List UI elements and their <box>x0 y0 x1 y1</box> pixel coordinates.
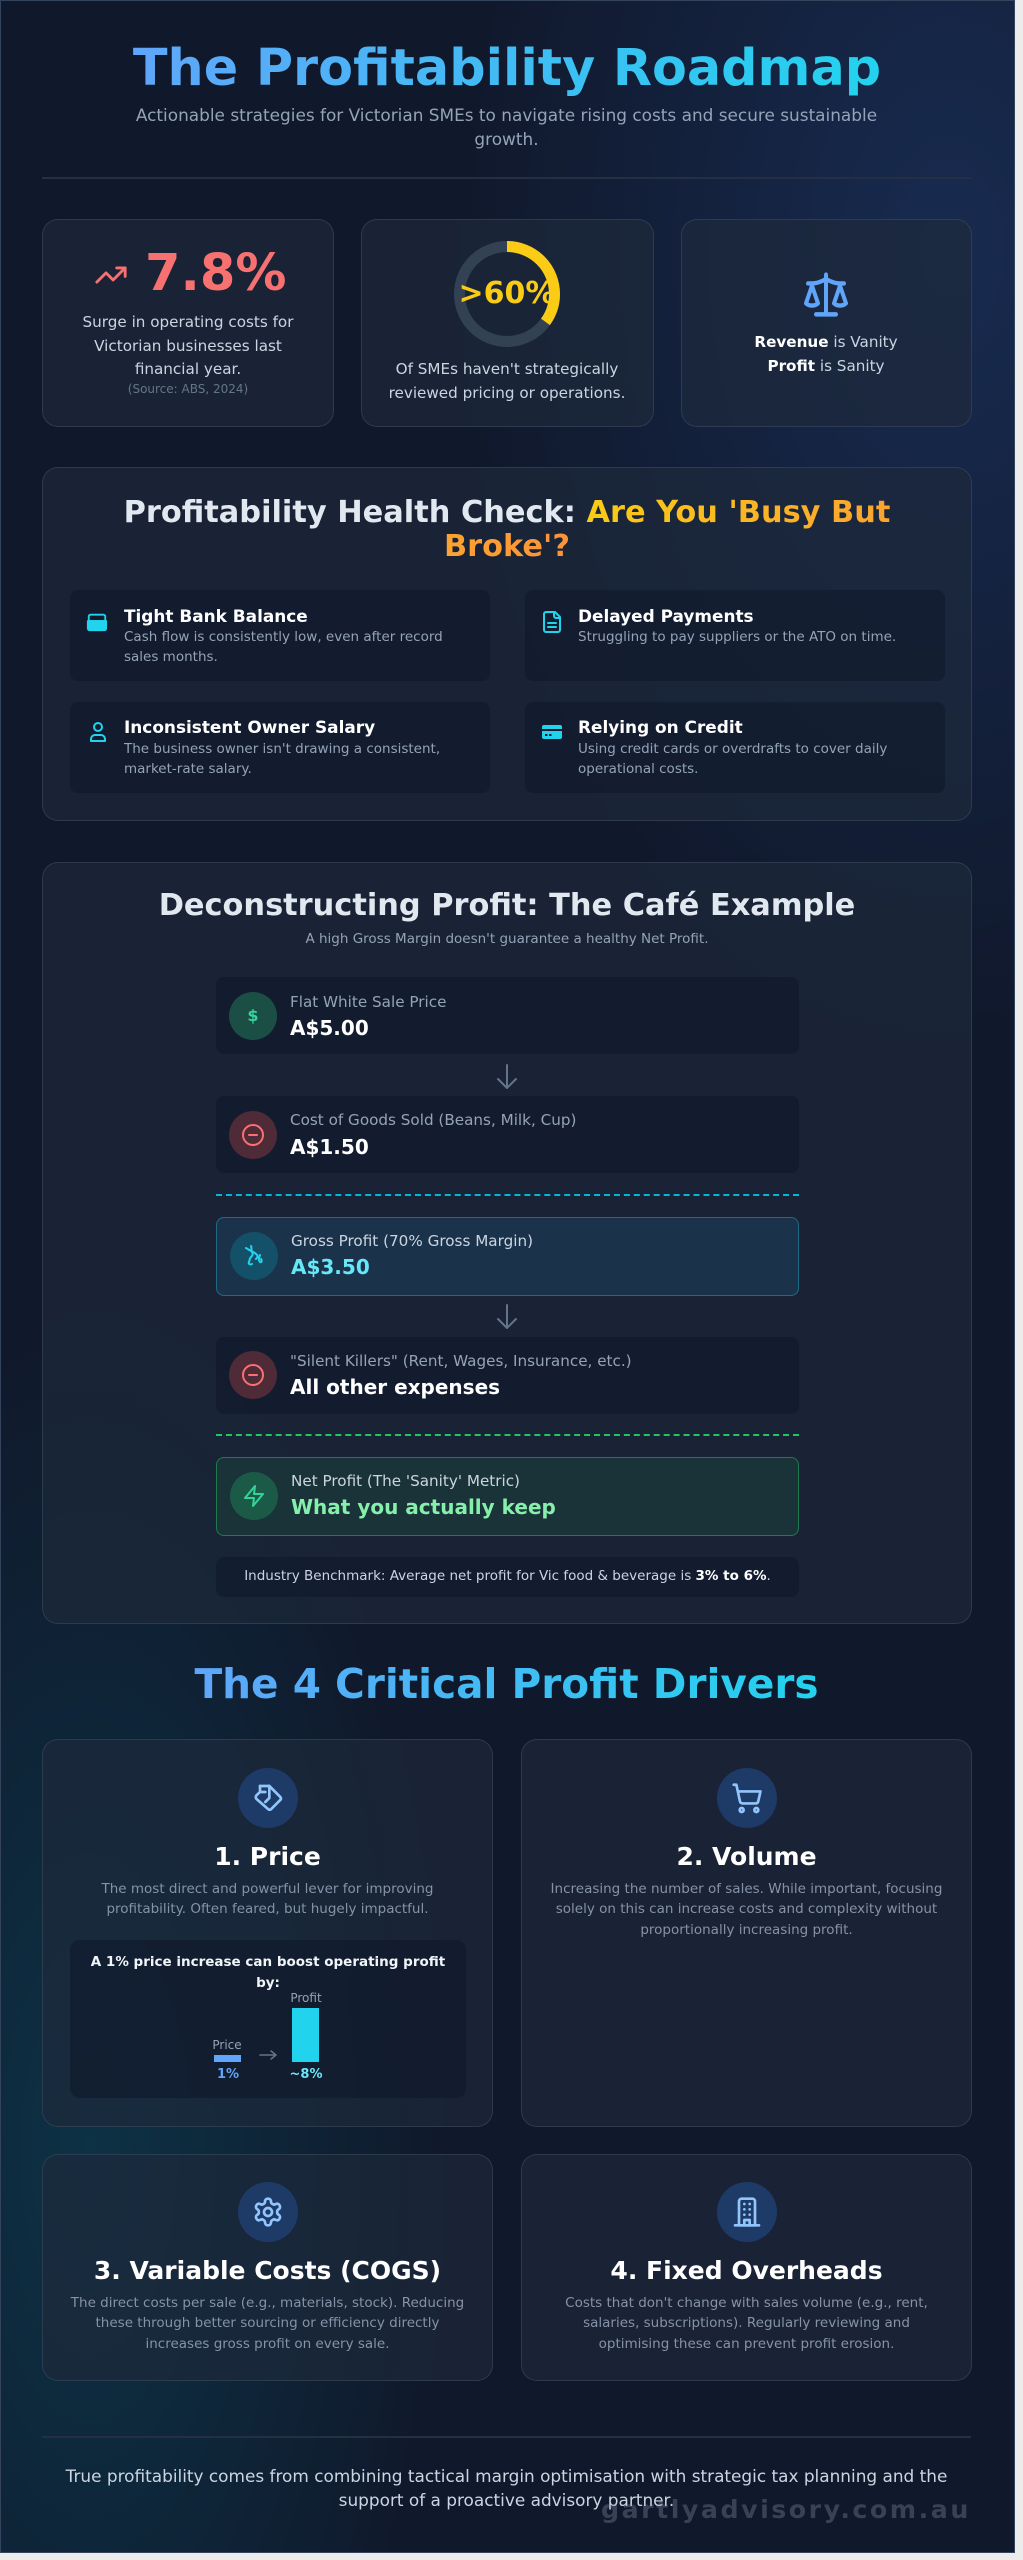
panel: stat 7.8% <box>42 219 334 427</box>
item text: Using credit cards or overdrafts to cover daily <box>578 741 887 757</box>
card text <box>551 1881 942 1938</box>
profit label: Profit <box>290 1991 322 2005</box>
item title: Relying on Credit <box>578 717 743 737</box>
icon: trending up <box>95 266 127 284</box>
item: relying on credit <box>525 702 945 793</box>
panel: fixed overheads <box>521 2154 972 2381</box>
card text: increases gross profit on every sale. <box>145 2336 390 2352</box>
card text <box>101 1881 433 1917</box>
icon: credit card <box>542 725 562 739</box>
row: gross profit <box>216 1217 799 1296</box>
stat description <box>389 360 625 402</box>
card text: The direct costs per sale (e.g., materials, stock). Reducing <box>71 2295 464 2311</box>
item text: market-rate salary. <box>124 761 252 777</box>
icon: gross profit <box>230 1232 278 1280</box>
card text <box>565 2295 928 2352</box>
icon: document <box>543 611 561 633</box>
card text: Increasing the number of sales. While important, focusing <box>551 1881 942 1897</box>
stat description <box>83 313 294 378</box>
card text: The most direct and powerful lever for improving <box>102 1881 433 1897</box>
net divider <box>216 1434 799 1436</box>
icon: gear <box>238 2182 298 2242</box>
item: delayed payments <box>525 590 945 681</box>
callout heading: A 1% price increase can boost operating profit <box>91 1954 445 1970</box>
footer message: True profitability comes from combining tactical margin optimisation with strategic tax planning and the <box>66 2466 947 2486</box>
row label: Gross Profit (70% Gross Margin) <box>291 1232 533 1250</box>
profit value: ~8% <box>290 2067 322 2082</box>
item: tight bank balance <box>70 590 490 681</box>
panel: revenue vs profit <box>681 219 972 427</box>
icon: scales <box>804 272 848 317</box>
donut chart <box>454 241 560 347</box>
heading <box>124 495 890 564</box>
arrow down <box>497 1304 517 1329</box>
panel: variable costs <box>42 2154 493 2381</box>
callout heading: by: <box>256 1975 280 1991</box>
stat description: Surge in operating costs for <box>83 313 293 331</box>
price bar <box>214 2055 241 2062</box>
subtitle <box>136 105 877 149</box>
row value: A$3.50 <box>291 1255 370 1279</box>
item text: The business owner isn't drawing a consistent, <box>124 741 440 757</box>
row: sale price <box>216 977 799 1054</box>
card title: 4. Fixed Overheads <box>610 2256 883 2285</box>
price value: 1% <box>217 2067 239 2082</box>
heading: profit drivers: The 4 Critical Profit Drivers <box>194 1660 819 1708</box>
card text <box>70 2295 464 2352</box>
row: other expenses <box>216 1337 799 1414</box>
icon: minus circle <box>229 1111 277 1159</box>
item text <box>124 629 443 665</box>
item text: sales months. <box>124 649 218 665</box>
watermark: gartlyadvisory.com.au <box>601 2495 971 2524</box>
panel: cafe example <box>42 862 972 1624</box>
item text: Cash flow is consistently low, even after record <box>124 629 443 645</box>
card text: solely on this can increase costs and complexity without <box>556 1901 937 1917</box>
panel: price <box>42 1739 493 2127</box>
stat description: reviewed pricing or operations. <box>389 384 625 402</box>
row value: A$1.50 <box>290 1135 369 1159</box>
card title: 2. Volume <box>676 1842 817 1871</box>
item text: Struggling to pay suppliers or the ATO on time. <box>578 629 896 645</box>
card text: optimising these can prevent profit erosion. <box>599 2336 894 2352</box>
card text: Costs that don't change with sales volume (e.g., rent, <box>565 2295 928 2311</box>
bar chart <box>212 1991 322 2082</box>
card text: these through better sourcing or efficiency directly <box>96 2315 439 2331</box>
subtitle: Actionable strategies for Victorian SMEs to navigate rising costs and secure sustainable <box>136 105 877 125</box>
row label: Flat White Sale Price <box>290 993 446 1011</box>
heading: cafe: Deconstructing Profit: The Café Example <box>159 888 855 923</box>
item: inconsistent owner salary <box>70 702 490 793</box>
callout: price impact <box>70 1940 466 2098</box>
subtitle: growth. <box>474 129 539 149</box>
row label: Cost of Goods Sold (Beans, Milk, Cup) <box>290 1111 576 1129</box>
arrow <box>259 2050 277 2060</box>
slogan: Revenue is Vanity <box>754 333 898 351</box>
benchmark note <box>216 1557 799 1597</box>
icon: dollar <box>229 992 277 1040</box>
item text <box>578 741 887 777</box>
card text: salaries, subscriptions). Regularly reviewing and <box>583 2315 910 2331</box>
card title: 3. Variable Costs (COGS) <box>94 2256 441 2285</box>
icon: bank card <box>86 614 108 632</box>
row value: What you actually keep <box>291 1495 556 1519</box>
panel: stat 60% <box>361 219 654 427</box>
stat description: Of SMEs haven't strategically <box>396 360 618 378</box>
card text: profitability. Often feared, but hugely impactful. <box>106 1901 429 1917</box>
arrow down <box>497 1064 517 1089</box>
card title: 1. Price <box>214 1842 321 1871</box>
panel: health check <box>42 467 972 821</box>
heading: Broke'? <box>444 528 570 564</box>
profit bar <box>292 2008 319 2062</box>
row: net profit <box>216 1457 799 1536</box>
item text: operational costs. <box>578 761 698 777</box>
icon: building <box>717 2182 777 2242</box>
gross divider <box>216 1194 799 1196</box>
footer message: support of a proactive advisory partner. <box>339 2490 674 2510</box>
card text: proportionally increasing profit. <box>640 1922 853 1938</box>
callout heading <box>90 1954 445 1991</box>
benchmark note: Industry Benchmark: Average net profit for Vic food & beverage is 3% to 6%. <box>244 1568 771 1584</box>
icon: person <box>90 722 106 742</box>
icon: minus circle <box>229 1351 277 1399</box>
cafe subtitle: A high Gross Margin doesn't guarantee a healthy Net Profit. <box>305 931 709 947</box>
stat value: 7.8% <box>145 244 286 303</box>
row: cogs <box>216 1096 799 1173</box>
item text <box>124 741 440 777</box>
row value: A$5.00 <box>290 1016 369 1040</box>
item title: Inconsistent Owner Salary <box>124 717 375 737</box>
price label: Price <box>212 2038 242 2052</box>
slogan: Profit is Sanity <box>767 357 885 375</box>
footer message <box>66 2466 947 2510</box>
donut value: >60% <box>459 276 555 311</box>
panel: volume <box>521 1739 972 2127</box>
row label: "Silent Killers" (Rent, Wages, Insurance, etc.) <box>290 1352 632 1370</box>
row value: All other expenses <box>290 1375 500 1399</box>
row label: Net Profit (The 'Sanity' Metric) <box>291 1472 520 1490</box>
slogan <box>754 333 898 375</box>
source note: (Source: ABS, 2024) <box>128 382 248 396</box>
icon: price tag <box>238 1768 298 1828</box>
item title: Tight Bank Balance <box>124 606 308 626</box>
stat description: Victorian businesses last <box>94 337 282 355</box>
icon: cart <box>717 1768 777 1828</box>
stat description: financial year. <box>135 360 241 378</box>
icon: lightning <box>230 1472 278 1520</box>
heading: Profitability Health Check: Are You 'Busy But <box>124 495 890 530</box>
title: The Profitability Roadmap <box>133 38 881 97</box>
item title: Delayed Payments <box>578 606 754 626</box>
icon: dollar: $ <box>247 1006 259 1025</box>
